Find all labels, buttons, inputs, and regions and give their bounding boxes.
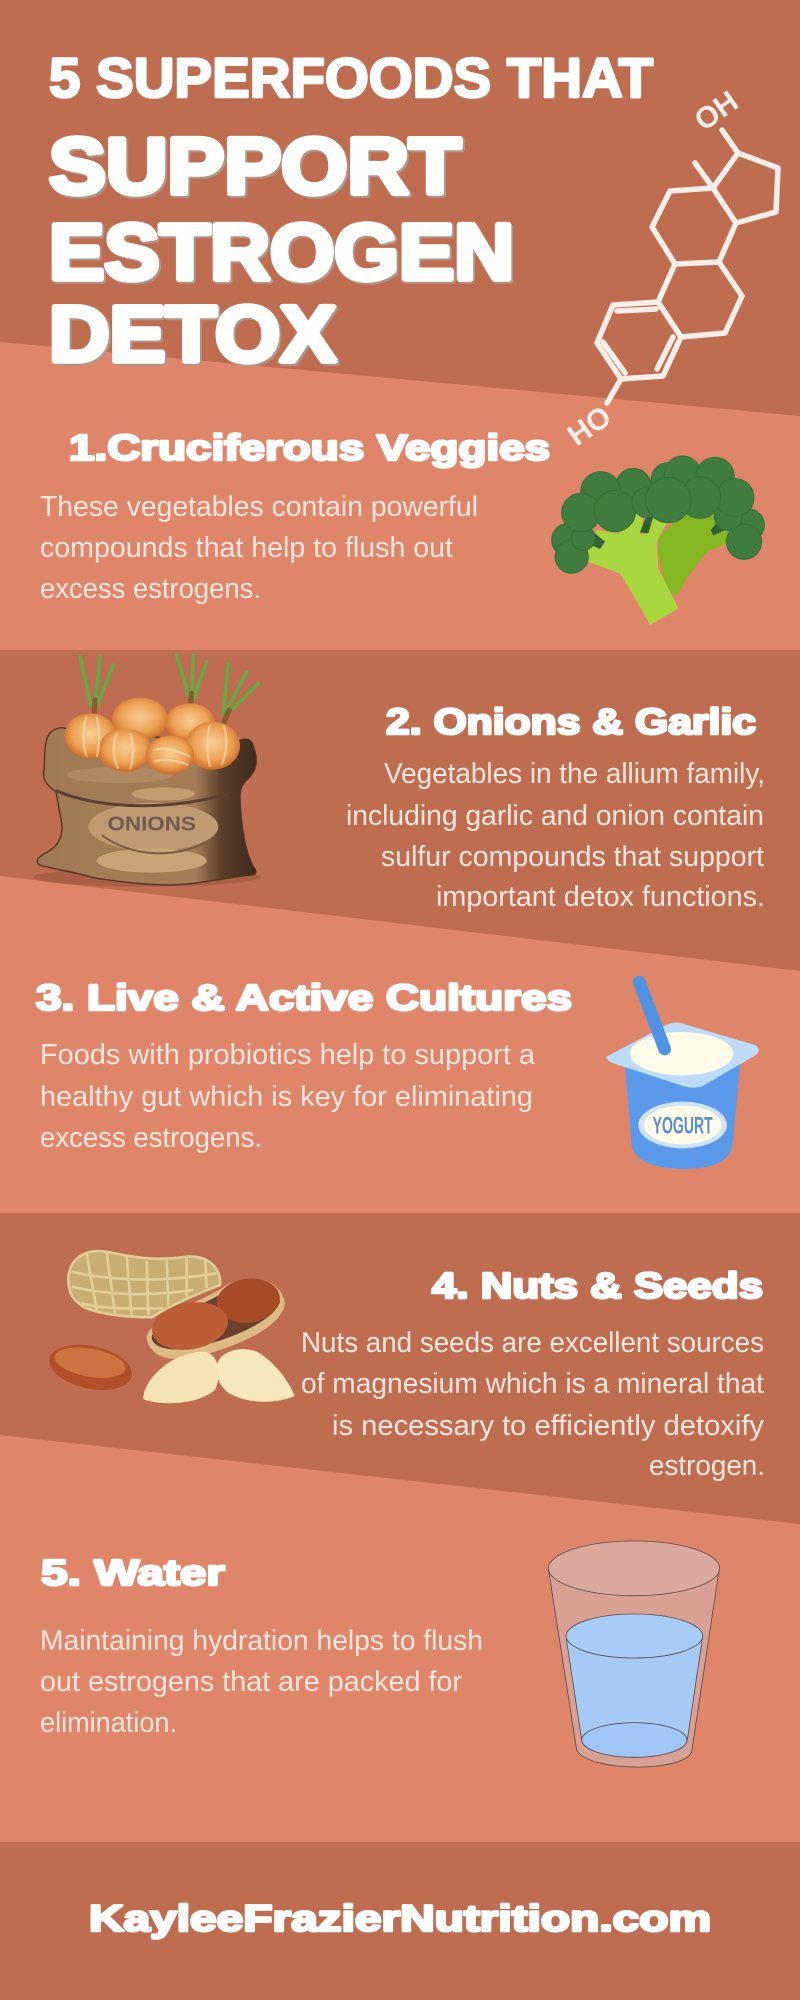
text: section 1 body: These vegetables contain powerful [40,491,478,523]
icon: glass of water [548,1541,720,1767]
footer: website: KayleeFrazierNutrition.com [89,1898,711,1939]
text: section 4 body: Nuts and seeds are excellent sources [301,1327,764,1359]
text: section 4 body [301,1327,765,1482]
panel: water [40,1541,720,1767]
text: section 1 body: excess estrogens. [40,573,261,605]
panel background: sections 2 to 3 [0,876,800,1213]
panel: nuts and seeds [45,1251,765,1482]
text: section 4 body: estrogen. [649,1450,765,1482]
text: section 2 body: sulfur compounds that support [381,841,764,873]
text: section 4 body: of magnesium which is a mineral that [301,1368,764,1400]
text: section 4 body: is necessary to efficiently detoxify [332,1410,765,1442]
icon: broccoli [552,456,764,625]
text: section 1 body: compounds that help to flush out [40,532,453,564]
panel: cruciferous veggies [40,427,764,625]
icon: sack of onions: ONIONS [107,813,196,836]
heading: section 5: 5. Water [41,1552,225,1593]
text: section 3 body: healthy gut which is key for eliminating [40,1081,533,1113]
text: section 2 body [346,758,765,913]
panel background: section 5 [0,1435,800,1842]
heading: section 4: 4. Nuts & Seeds [432,1265,763,1306]
heading: section 3: 3. Live & Active Cultures [36,977,572,1018]
heading: section 2: 2. Onions & Garlic [386,701,756,742]
title: SUPPORT [49,121,461,210]
text: section 5 body: elimination. [40,1707,177,1739]
icon: yogurt cup [606,982,759,1169]
icon: sack of onions [33,655,260,887]
panel: onions and garlic [33,655,765,913]
text: section 5 body [40,1625,483,1739]
title: ESTROGEN [49,207,514,296]
icon: estrogen molecule: OH [689,85,744,138]
icon: estrogen molecule [562,85,778,453]
icon: yogurt cup: YOGURT [653,1113,713,1140]
panel background: section 1 [0,342,800,650]
text: section 3 body: excess estrogens. [40,1122,262,1154]
title [49,46,653,378]
title: DETOX [49,289,336,378]
text: section 1 body [40,491,478,605]
text: section 3 body [40,1039,535,1154]
icon: peanuts [45,1251,295,1403]
text: section 2 body: important detox functions. [436,881,765,913]
title: 5 SUPERFOODS THAT [49,46,653,109]
text: section 3 body: Foods with probiotics help to support a [40,1039,535,1071]
panel: live and active cultures [36,977,759,1169]
text: section 5 body: Maintaining hydration helps to flush [40,1625,483,1657]
text: section 5 body: out estrogens that are packed for [40,1666,463,1698]
icon: estrogen molecule: HO [562,400,617,453]
heading: section 1: 1.Cruciferous Veggies [69,427,550,468]
text: section 2 body: including garlic and onion contain [346,800,764,832]
text: section 2 body: Vegetables in the allium family, [384,758,765,790]
